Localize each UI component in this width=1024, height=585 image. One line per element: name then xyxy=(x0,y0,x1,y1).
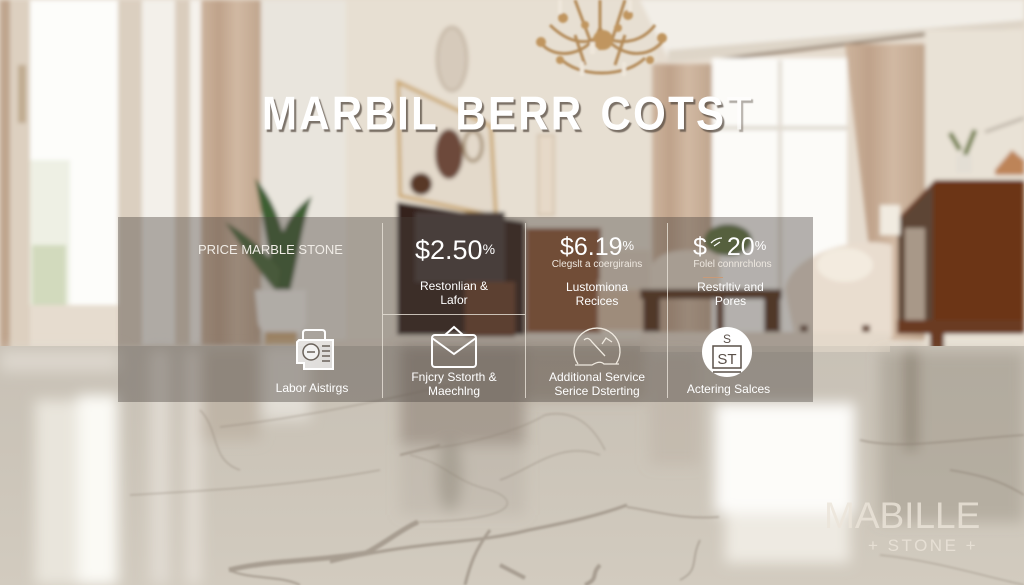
logo name: MABILLE xyxy=(824,495,980,536)
floor xyxy=(0,346,1024,585)
label: fabrication: Fnjcry Sstorth & xyxy=(411,370,497,384)
price 1: $2.50% xyxy=(415,235,495,265)
caption 1: Lafor xyxy=(440,293,468,307)
caption 3: Pores xyxy=(715,294,746,308)
label: price marble stone: PRICE MARBLE STONE xyxy=(198,242,343,257)
logo subtitle: + STONE + xyxy=(868,536,978,555)
caption 1: Restonlian & xyxy=(420,279,488,293)
label: altering sales: Actering Salces xyxy=(687,382,770,396)
label: labor listings: Labor Aistirgs xyxy=(276,381,348,395)
console xyxy=(397,202,525,335)
icon: ST badge xyxy=(702,327,752,377)
column dividers xyxy=(382,223,723,398)
watermark logo xyxy=(824,495,980,555)
caption 3: Restrltiv and xyxy=(697,280,764,294)
icon: ST badge: S xyxy=(723,332,731,346)
panel: pricing overview xyxy=(118,217,813,402)
chandelier xyxy=(536,0,667,76)
price 2 note: Clegslt a coergirains xyxy=(552,259,642,270)
marble veins xyxy=(130,385,1024,585)
caption 1 xyxy=(420,279,488,307)
label: additional service: Serice Dsterting xyxy=(554,384,640,398)
caption 2: Lustomiona xyxy=(566,280,628,294)
label: fabrication: Maechlng xyxy=(428,384,480,398)
plant xyxy=(255,178,312,292)
label: additional service: Additional Service xyxy=(549,370,645,384)
sofa and table xyxy=(526,228,601,333)
price 2: $6.19% xyxy=(560,233,634,261)
label: additional service xyxy=(549,370,645,398)
price 3 note: Folel connrchlons xyxy=(693,259,772,270)
icon: ST badge: ST xyxy=(717,351,737,368)
wall decor xyxy=(437,27,467,91)
caption 2 xyxy=(566,280,628,308)
icon: envelope case xyxy=(431,326,477,368)
caption 2: Recices xyxy=(576,294,618,308)
icon: labor tag xyxy=(296,329,334,370)
title: MARBIL BERR COTST xyxy=(262,87,754,140)
right cabinet xyxy=(898,180,1024,322)
caption 3 xyxy=(697,280,764,308)
label: fabrication xyxy=(411,370,497,398)
icon: service circle xyxy=(573,327,621,366)
price 3: $ 20% xyxy=(693,233,766,261)
